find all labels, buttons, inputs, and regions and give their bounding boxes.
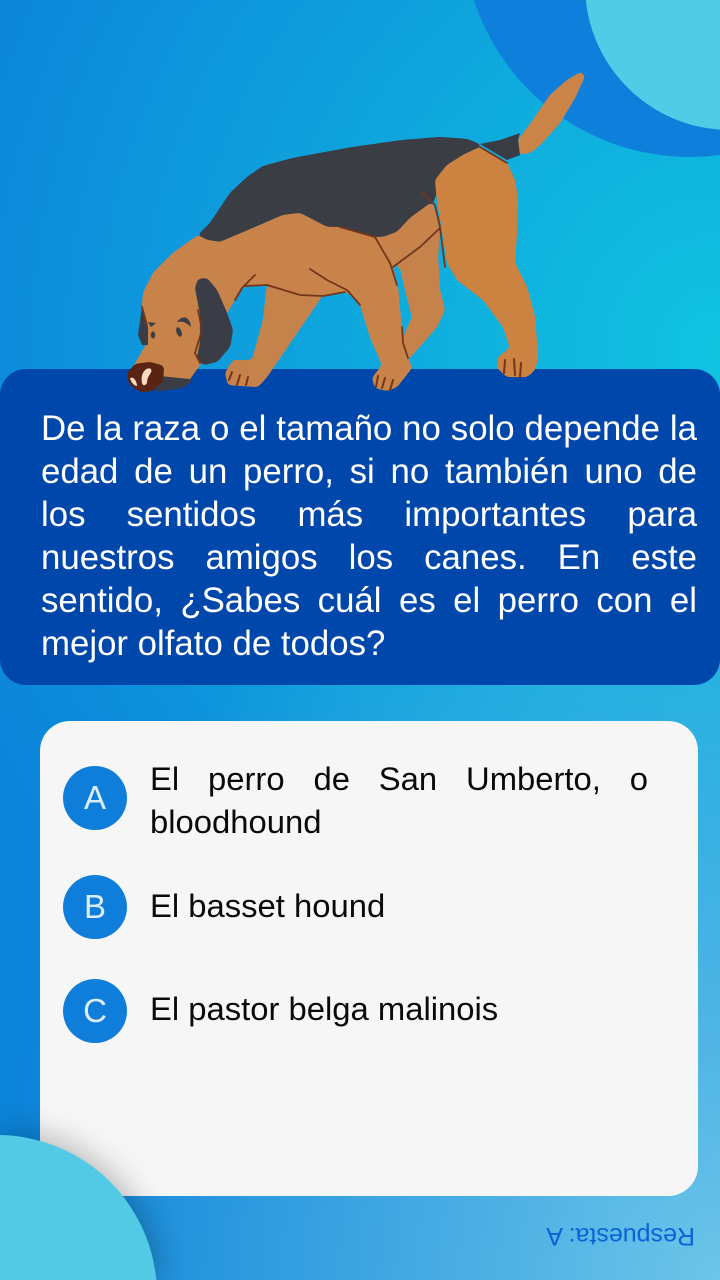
black back <box>198 137 482 245</box>
hind leg <box>435 147 538 377</box>
option A text: bloodhound <box>150 803 321 840</box>
question text: nuestros amigos los canes. En este <box>41 538 697 577</box>
option B bullet: B <box>84 888 106 925</box>
option A text: El perro de San Umberto, o <box>150 760 648 797</box>
toes <box>229 359 521 390</box>
option B text: El basset hound <box>150 887 385 924</box>
option C bullet <box>63 979 127 1043</box>
option C text: El pastor belga malinois <box>150 990 498 1027</box>
far eye patch <box>138 307 148 345</box>
eyes and brow <box>148 317 191 338</box>
nose highlights <box>130 368 151 386</box>
question text: mejor olfato de todos? <box>41 624 385 663</box>
panel: question <box>0 369 720 685</box>
muzzle shadow <box>157 377 192 391</box>
option C bullet: C <box>83 992 107 1029</box>
ear <box>195 278 233 365</box>
far hind leg <box>393 228 445 360</box>
nose <box>127 362 164 392</box>
question text: De la raza o el tamaño no solo depende la <box>41 409 697 448</box>
decorative circle: bottom left <box>0 1118 172 1280</box>
panel: answer options <box>40 721 698 1196</box>
question text: sentido, ¿Sabes cuál es el perro con el <box>41 581 697 620</box>
option A bullet: A <box>84 779 106 816</box>
fur lines <box>142 147 507 363</box>
option B bullet <box>63 875 127 939</box>
option A text <box>150 760 648 840</box>
tail base <box>480 133 520 160</box>
question text <box>41 409 697 663</box>
question text: edad de un perro, si no también uno de <box>41 452 697 491</box>
tail <box>518 72 585 155</box>
head, shoulder and front leg <box>128 202 440 391</box>
question text: los sentidos más importantes para <box>41 495 697 534</box>
illustration: dog sniffing <box>128 73 584 392</box>
answer text upside down: Respuesta: A <box>546 1222 695 1250</box>
decorative circles: top right <box>474 0 720 157</box>
far front leg <box>225 285 323 387</box>
option A bullet <box>63 766 127 830</box>
